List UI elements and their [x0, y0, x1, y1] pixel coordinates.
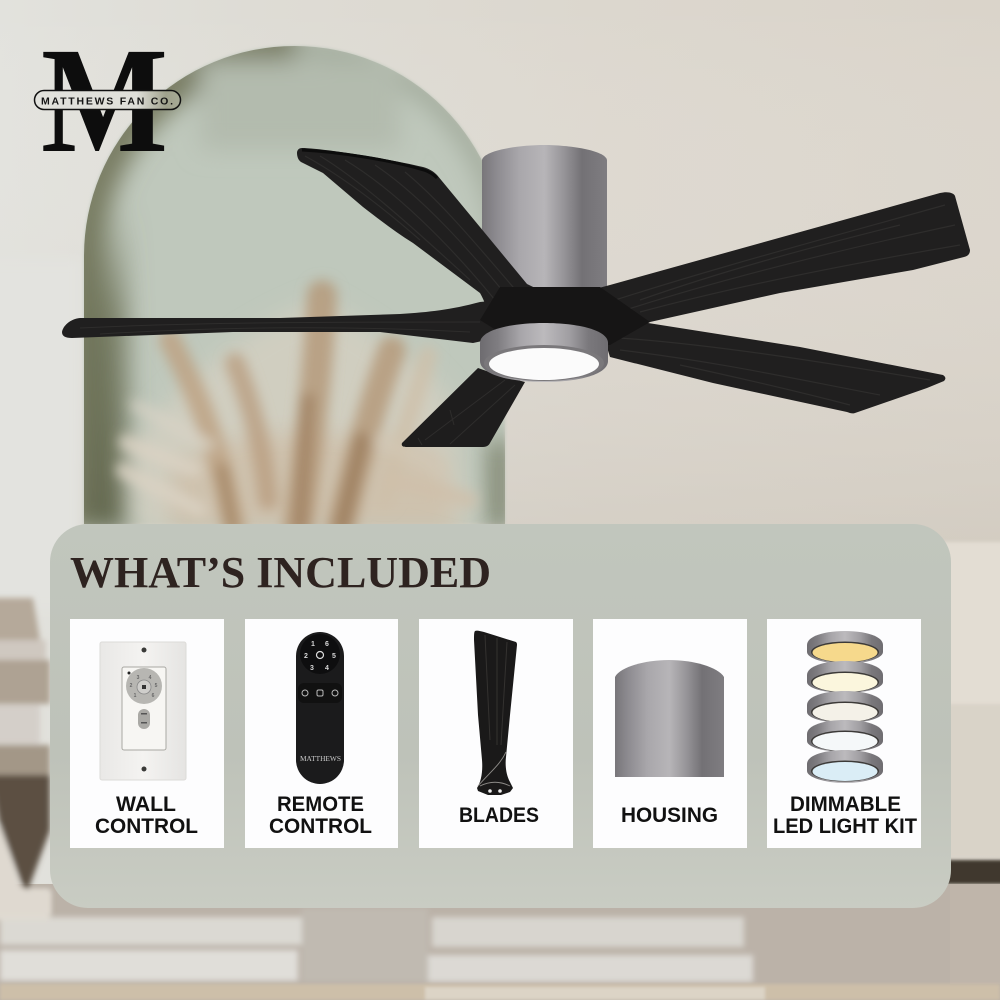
- background: left cushions and plant: [0, 598, 50, 915]
- label: blades: BLADES: [459, 804, 539, 827]
- icon: housing: [615, 660, 724, 777]
- icon: wall control plate: 5: [155, 683, 158, 689]
- pampas halo: [130, 300, 470, 530]
- fan blade: upper left: [297, 148, 560, 325]
- label: dimmable LED light kit: DIMMABLE: [790, 793, 901, 816]
- fan blade: lower: [402, 368, 525, 447]
- label: wall control: CONTROL: [95, 815, 198, 838]
- label: remote control: [269, 793, 372, 838]
- card: remote control: [245, 619, 398, 848]
- icon: wall control plate: 3: [137, 675, 140, 681]
- icon: remote: 2: [304, 653, 308, 660]
- label: remote control: CONTROL: [269, 815, 372, 838]
- icon: remote: 1: [311, 641, 315, 648]
- icon: remote: 3: [310, 665, 314, 672]
- panel: what's included: [50, 524, 951, 908]
- fan housing: [482, 145, 607, 295]
- icon: five LED rings: [807, 631, 883, 783]
- icon: wall control plate: 1: [134, 693, 137, 699]
- icon: remote: 5: [332, 653, 336, 660]
- label: housing: HOUSING: [621, 804, 718, 827]
- background: floor with window light: [0, 884, 1000, 1000]
- icon: remote: 4: [325, 665, 329, 672]
- logo name pill: MATTHEWS FAN CO.: [41, 96, 173, 108]
- background: sofa on right: [940, 542, 1000, 884]
- icon: wall control plate: 4: [149, 675, 152, 681]
- icon: remote: [296, 632, 344, 784]
- card: blades: [419, 619, 573, 848]
- icon: remote: 6: [325, 641, 329, 648]
- LED light fixture: [480, 323, 608, 382]
- label: wall control: [95, 793, 198, 838]
- background: arched niche with pampas grass: [84, 46, 508, 530]
- label: wall control: WALL: [116, 793, 176, 816]
- ceiling fan: [62, 145, 970, 447]
- card: housing: [593, 619, 747, 848]
- fan blade: upper right: [580, 192, 970, 326]
- card: wall control: [70, 619, 224, 848]
- logo: Matthews Fan Co.: [34, 16, 180, 184]
- logo letter M: M: [41, 16, 168, 184]
- logo name pill: [34, 90, 180, 110]
- icon: blade: [474, 631, 517, 795]
- icon: wall control plate: 6: [152, 693, 155, 699]
- fan blade: lower right: [600, 323, 945, 413]
- icon: remote: MATTHEWS: [300, 754, 341, 763]
- icon: wall control plate: 2: [130, 683, 133, 689]
- icon: wall control plate: [100, 642, 186, 780]
- heading: WHAT’S INCLUDED: [70, 547, 491, 597]
- fan hub: [480, 287, 650, 345]
- card: dimmable LED light kit: [767, 619, 921, 848]
- label: remote control: REMOTE: [277, 793, 364, 816]
- label: dimmable LED light kit: LED LIGHT KIT: [773, 815, 917, 838]
- label: dimmable LED light kit: [773, 793, 917, 838]
- fan blade: left: [62, 300, 510, 343]
